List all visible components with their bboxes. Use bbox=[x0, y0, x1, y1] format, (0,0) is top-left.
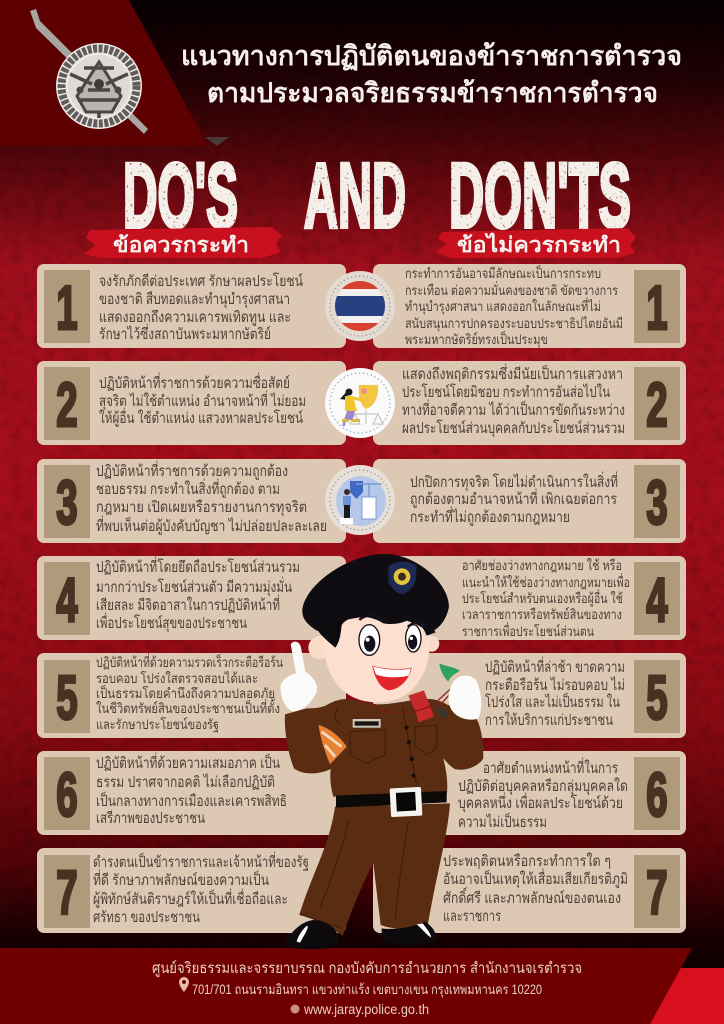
panel: don't 7 bbox=[373, 848, 686, 933]
panel: don't 3: ปกปิดการทุจริต โดยไม่ดำเนินการในสิ่งที่ bbox=[410, 471, 618, 492]
panel: don't 4: ราชการเพื่อประโยชน์ส่วนตน bbox=[462, 622, 594, 639]
panel: don't 1 bbox=[373, 264, 686, 348]
panel: do 3: ที่พบเห็นต่อผู้บังคับบัญชา ไม่ปล่อยปละละเลย bbox=[96, 515, 327, 535]
panel: do 2: 2 bbox=[56, 370, 78, 439]
mascot mouth bbox=[372, 666, 412, 690]
mascot belt and buckle bbox=[336, 787, 447, 817]
panel: do 7: 7 bbox=[56, 858, 78, 927]
panel: don't 3 bbox=[373, 459, 686, 543]
panel: do 6 bbox=[37, 751, 346, 835]
mascot hair bbox=[317, 605, 436, 648]
title bbox=[181, 41, 682, 108]
panel: don't 7: อันอาจเป็นเหตุให้เสื่อมเสียเกียรติภูมิ bbox=[443, 868, 628, 889]
police officer mascot bbox=[280, 554, 483, 949]
panel: do 2: ให้ผู้อื่น ใช้ตำแหน่ง แสวงหาผลประโยชน์ bbox=[99, 407, 303, 427]
panel: do 3: ชอบธรรม กระทำในสิ่งที่ถูกต้อง ตาม bbox=[96, 478, 280, 498]
panel: don't 3: กระทำที่ไม่ถูกต้องตามกฎหมาย bbox=[410, 506, 570, 526]
mascot trouser creases bbox=[300, 822, 408, 928]
panel: don't 7: และราชการ bbox=[443, 908, 501, 925]
panel: don't 3: 3 bbox=[646, 468, 668, 537]
panel: do 2: ปฏิบัติหน้าที่ราชการด้วยความซื่อสัตย์ bbox=[99, 372, 290, 392]
panel: don't 6: อาศัยตำแหน่งหน้าที่ในการ bbox=[483, 757, 618, 777]
mascot gloves bbox=[280, 642, 481, 720]
footer website: www.jaray.police.go.th bbox=[303, 1002, 429, 1017]
panel: don't 2: ประโยชน์โดยมิชอบ กระทำการอันส่อไปใน bbox=[402, 383, 610, 401]
panel: don't 4: ประโยชน์สำหรับตนเองหรือผู้อื่น ใช้ bbox=[462, 589, 623, 607]
panel: do 7: ผู้พิทักษ์สันติราษฎร์ให้เป็นที่เชื่อถือและ bbox=[93, 888, 288, 908]
panel: don't 2: ทางที่อาจตีความ ได้ว่าเป็นการขัดกันระหว่าง bbox=[402, 399, 625, 419]
panel: don't 6 bbox=[373, 751, 686, 835]
panel: don't 1: ทำนุบำรุงศาสนา แสดงออกในลักษณะที่ไม่ bbox=[405, 297, 601, 315]
mascot beret bbox=[302, 554, 449, 632]
mascot red scarf bbox=[408, 690, 434, 722]
icon: officer with scales of justice bbox=[325, 465, 395, 535]
panel: don't 5: 5 bbox=[646, 663, 668, 732]
mascot cap badge bbox=[388, 562, 417, 594]
icon: map pin bbox=[179, 977, 189, 992]
panel: do 5: ปฏิบัติหน้าที่ด้วยความรวดเร็วกระตือรือร้น bbox=[96, 653, 283, 670]
label: do's ribbon bbox=[84, 227, 282, 258]
mascot shirt details bbox=[335, 708, 437, 785]
panel: do 6: 6 bbox=[56, 760, 78, 829]
panel: do 3: กฎหมาย เปิดเผยหรือรายงานการทุจริต bbox=[96, 499, 307, 517]
panel: don't 4: 4 bbox=[646, 565, 668, 634]
panel: do 4: มากกว่าประโยชน์ส่วนตัว มีความมุ่งมั่น bbox=[96, 576, 292, 597]
panel: do 1: ของชาติ สืบทอดและทำนุบำรุงศาสนา bbox=[99, 291, 290, 309]
panel: do 3 bbox=[37, 459, 346, 543]
panel: don't 1: 1 bbox=[646, 273, 668, 342]
panel: don't 7: ศักดิ์ศรี และภาพลักษณ์ของตนเอง bbox=[443, 887, 621, 907]
panel: do 5 bbox=[37, 653, 346, 738]
mascot shoes bbox=[285, 920, 436, 949]
panel: do 6: เป็นกลางทางการเมืองและเคารพสิทธิ bbox=[96, 791, 287, 810]
panel: don't 1: กระทำการอันอาจมีลักษณะเป็นการกระทบ bbox=[405, 264, 601, 281]
panel: don't 2: ผลประโยชน์ส่วนบุคคลกับประโยชน์ส่วนรวม bbox=[402, 419, 625, 438]
panel: don't 6: ปฏิบัติต่อบุคคลหรือกลุ่มบุคคลใด bbox=[458, 777, 628, 796]
panel: don't 1: กระเทือน ต่อความมั่นคงของชาติ ขัดขวางการ bbox=[405, 281, 618, 298]
mascot torso and arms bbox=[285, 699, 483, 797]
footer bbox=[0, 948, 724, 1024]
icon: Thai flag bbox=[325, 271, 395, 341]
panel: don't 3: ถูกต้องตามอำนาจหน้าที่ เพิกเฉยต่อการ bbox=[410, 488, 617, 508]
panel: don't 4: อาศัยช่องว่างทางกฎหมาย ใช้ หรือ bbox=[462, 557, 622, 573]
mascot legs bbox=[299, 803, 450, 936]
panel: do 7: ดำรงตนเป็นข้าราชการและเจ้าหน้าที่ของรัฐ bbox=[93, 851, 309, 871]
heading: Do's and Don'ts bbox=[123, 145, 631, 247]
mascot ears bbox=[308, 636, 439, 659]
panel: don't 2: 2 bbox=[646, 370, 668, 439]
mascot name tag bbox=[353, 719, 381, 728]
mascot eyes bbox=[359, 615, 427, 655]
title: แนวทางการปฏิบัติตนของข้าราชการตำรวจ bbox=[181, 41, 682, 71]
panel: don't 5: โปร่งใส และไม่เป็นธรรม ใน bbox=[485, 692, 620, 711]
mascot lanyard and whistle bbox=[370, 663, 460, 718]
panel: do 1: 1 bbox=[56, 273, 78, 342]
panel: don't 4: เวลาราชการหรือทรัพย์สินของทาง bbox=[462, 606, 622, 622]
panel: do 6: ปฏิบัติหน้าที่ด้วยความเสมอภาค เป็น bbox=[96, 752, 280, 772]
panel: don't 6: บุคคลหนึ่ง เพื่อผลประโยชน์ด้วย bbox=[458, 792, 623, 813]
panel: do 4 bbox=[37, 556, 346, 640]
icon: police emblem bbox=[30, 9, 148, 134]
panel: do 1: จงรักภักดีต่อประเทศ รักษาผลประโยชน์ bbox=[99, 272, 303, 290]
heading: Do's and Don'ts: AND bbox=[304, 145, 406, 247]
title: ตามประมวลจริยธรรมข้าราชการตำรวจ bbox=[207, 78, 658, 108]
panel: do 7: ศรัทธา ของประชาชน bbox=[93, 909, 200, 926]
panel: do 4: ปฏิบัติหน้าที่โดยยึดถือประโยชน์ส่วนรวม bbox=[96, 556, 300, 576]
panel: don't 7: ประพฤติตนหรือกระทำการใด ๆ bbox=[443, 852, 611, 870]
panel: do 2 bbox=[37, 361, 346, 445]
panel: do 4: 4 bbox=[56, 565, 78, 634]
icon: globe bbox=[290, 1004, 300, 1014]
panel: don't 5: ปฏิบัติหน้าที่ล่าช้า ขาดความ bbox=[485, 656, 625, 676]
panel: do 5: ในชีวิตทรัพย์สินของประชาชนเป็นที่ตั้ง bbox=[96, 698, 280, 716]
panel: do 5: เป็นธรรมโดยคำนึงถึงความปลอดภัย bbox=[96, 684, 275, 701]
icon: woman with shield and scales bbox=[325, 368, 395, 438]
panel: do 3: ปฏิบัติหน้าที่ราชการด้วยความถูกต้อง bbox=[96, 460, 288, 480]
footer address: 701/701 ถนนรามอินทรา แขวงท่าแร้ง เขตบางเขน กรุงเทพมหานคร 10220 bbox=[192, 982, 542, 998]
heading: Do's and Don'ts: DO'S bbox=[123, 145, 238, 247]
panel: don't 2: แสดงถึงพฤติกรรมซึ่งมีนัยเป็นการแสวงหา bbox=[402, 363, 623, 383]
mascot face bbox=[324, 617, 430, 702]
panel: don't 6: ความไม่เป็นธรรม bbox=[458, 812, 547, 831]
panel: don't 6: 6 bbox=[646, 760, 668, 829]
panel: do 5: และรักษาประโยชน์ของรัฐ bbox=[96, 716, 219, 733]
panel: don't 5: การให้บริการแก่ประชาชน bbox=[485, 711, 613, 729]
panel: do 5: รอบคอบ โปร่งใสตรวจสอบได้และ bbox=[96, 670, 258, 686]
panel: do 4: เสียสละ มีจิตอาสาในการปฏิบัติหน้าที่ bbox=[96, 594, 280, 614]
panel: do 5: 5 bbox=[56, 663, 78, 732]
panel: do 1: รักษาไว้ซึ่งสถาบันพระมหากษัตริย์ bbox=[99, 323, 271, 343]
panel: do 1 bbox=[37, 264, 346, 348]
panel: do 2: สุจริต ไม่ใช้ตำแหน่ง อำนาจหน้าที่ ไม่ยอม bbox=[99, 390, 306, 411]
panel: don't 4 bbox=[373, 556, 686, 640]
panel: do 7: ที่ดี รักษาภาพลักษณ์ของความเป็น bbox=[93, 869, 269, 889]
label: do's ribbon: ข้อควรกระทำ bbox=[113, 233, 249, 257]
mascot armband bbox=[319, 725, 347, 764]
panel: don't 7: 7 bbox=[646, 858, 668, 927]
label: don'ts ribbon: ข้อไม่ควรกระทำ bbox=[457, 232, 621, 257]
panel: do 7 bbox=[37, 848, 346, 933]
panel: don't 2 bbox=[373, 361, 686, 445]
panel: do 4: เพื่อประโยชน์สุขของประชาชน bbox=[96, 612, 247, 633]
footer organisation name: ศูนย์จริยธรรมและจรรยาบรรณ กองบังคับการอำนวยการ สำนักงานจเรตำรวจ bbox=[152, 960, 582, 977]
panel: do 6: ธรรม ปราศจากอคติ ไม่เลือกปฏิบัติ bbox=[96, 773, 275, 791]
panel: do 1: แสดงออกถึงความเคารพเทิดทูน และ bbox=[99, 309, 291, 326]
panel: don't 1: พระมหากษัตริย์ทรงเป็นประมุข bbox=[405, 330, 548, 348]
panel: don't 5 bbox=[373, 653, 686, 738]
panel: do 6: เสรีภาพของประชาชน bbox=[96, 810, 205, 827]
panel: don't 1: สนับสนุนการปกครองระบอบประชาธิปไตยอันมี bbox=[405, 316, 623, 332]
panel: don't 5: กระตือรือร้น ไม่รอบคอบ ไม่ bbox=[485, 676, 625, 694]
panel: don't 4: แนะนำให้ใช้ช่องว่างทางกฎหมายเพื่อ bbox=[462, 573, 630, 590]
header corner panel with emblem bbox=[0, 0, 229, 146]
label: don'ts ribbon bbox=[436, 228, 636, 258]
panel: do 3: 3 bbox=[56, 468, 78, 537]
